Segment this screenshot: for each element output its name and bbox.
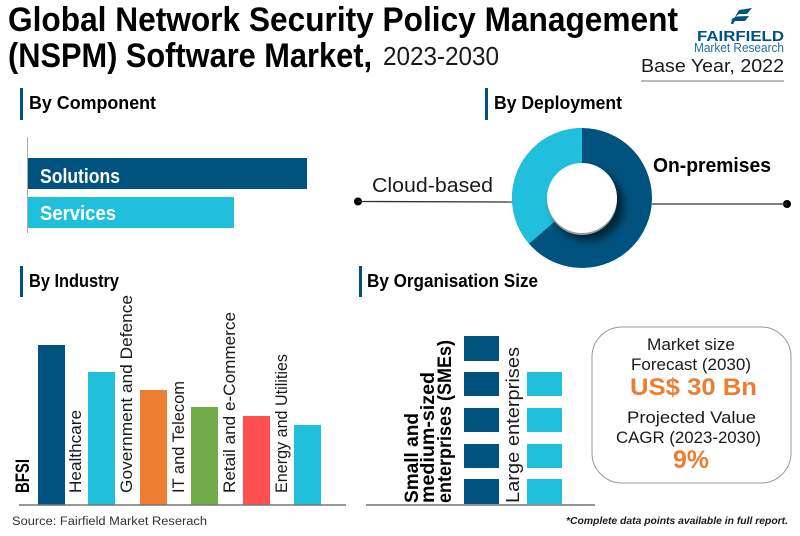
logo: Fairfield Market Research: Market Research bbox=[694, 41, 784, 55]
heading: by organisation size: By Organisation Size bbox=[367, 271, 538, 291]
label: on-premises: On-premises bbox=[653, 155, 771, 177]
donut chart bbox=[512, 128, 652, 268]
stacked blocks chart: organisation size: Small and bbox=[402, 413, 423, 503]
logo: Fairfield Market Research: FAIRFIELD bbox=[697, 29, 784, 45]
title: Global Network Security Policy Management bbox=[8, 1, 678, 39]
stacked blocks chart: organisation size: Large enterprises bbox=[502, 347, 523, 503]
bar chart: industry bbox=[13, 295, 346, 505]
heading: by industry: By Industry bbox=[29, 271, 119, 291]
stacked blocks chart: organisation size: enterprises (SMEs) bbox=[435, 340, 456, 503]
bar chart: industry: Healthcare bbox=[66, 410, 85, 493]
bar: services: Services bbox=[40, 203, 116, 225]
footnote: *Complete data points available in full report. bbox=[566, 516, 788, 527]
heading: by industry bbox=[20, 266, 119, 297]
callout: market size: Projected Value bbox=[627, 409, 756, 427]
heading: by component bbox=[20, 88, 156, 120]
stacked blocks chart: organisation size bbox=[366, 336, 595, 505]
callout: market size: US$ 30 Bn bbox=[630, 374, 757, 401]
base year: Base Year, 2022 bbox=[641, 55, 784, 76]
callout: market size: 9% bbox=[673, 446, 709, 474]
callout: market size: Market size bbox=[647, 336, 735, 354]
panel: by industry bbox=[13, 266, 346, 505]
label: on-premises bbox=[652, 155, 791, 208]
title bbox=[8, 1, 678, 75]
bar: solutions: Solutions bbox=[40, 166, 120, 188]
label: cloud-based: Cloud-based bbox=[372, 175, 493, 197]
label: cloud-based bbox=[354, 175, 512, 206]
heading: by deployment: By Deployment bbox=[494, 93, 622, 113]
logo: Fairfield Market Research bbox=[694, 8, 784, 55]
bar chart: industry: Government and Defence bbox=[117, 295, 136, 493]
heading: by deployment bbox=[485, 88, 622, 120]
callout: market size: Forecast (2030) bbox=[631, 356, 751, 374]
source: Source: Fairfield Market Reserach bbox=[12, 516, 207, 528]
callout: market size: CAGR (2023-2030) bbox=[616, 429, 761, 447]
bar chart: industry: Energy and Utilities bbox=[272, 354, 291, 493]
stacked blocks chart: organisation size: medium-sized bbox=[418, 372, 439, 503]
bar: services bbox=[28, 197, 234, 228]
bar: solutions bbox=[28, 158, 307, 189]
panel: by organisation size bbox=[359, 266, 595, 505]
title: 2023-2030 bbox=[383, 41, 499, 71]
panel: by component bbox=[20, 88, 307, 233]
bar chart: industry: Retail and e-Commerce bbox=[220, 312, 239, 493]
bar chart: industry: IT and Telecom bbox=[169, 381, 188, 493]
bar chart: industry: BFSI bbox=[13, 459, 34, 493]
title: (NSPM) Software Market, bbox=[8, 37, 372, 75]
panel: by deployment bbox=[354, 88, 791, 268]
heading: by component: By Component bbox=[29, 93, 156, 113]
heading: by organisation size bbox=[359, 266, 538, 297]
callout: market size bbox=[592, 327, 791, 483]
